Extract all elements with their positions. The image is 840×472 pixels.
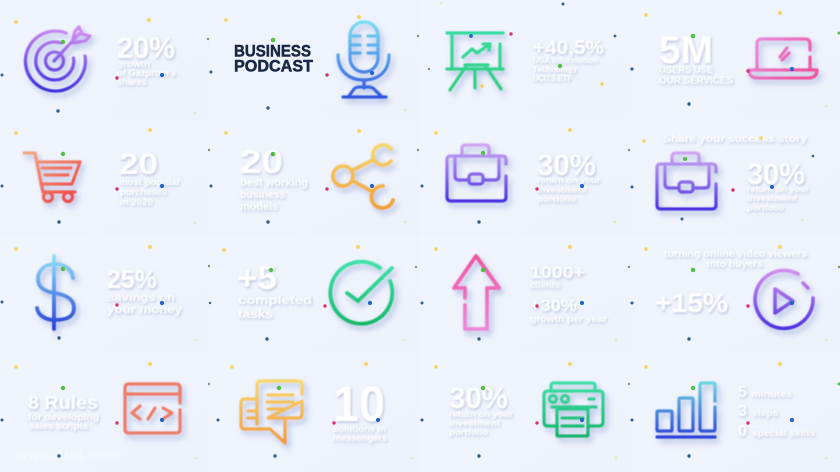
text: 20% growth: shares xyxy=(117,77,147,87)
panel: 20 best working business models xyxy=(240,143,393,213)
text: stats list xyxy=(738,384,815,440)
text: 20% growth xyxy=(117,32,176,87)
text: 30% xyxy=(449,382,514,437)
text: 20 most popular: in 2020 xyxy=(120,197,153,207)
icon: target with arrow xyxy=(25,27,90,91)
icon: presentation easel xyxy=(447,33,503,90)
text: stats list: 0 xyxy=(738,423,747,440)
text: 20 best working: best working xyxy=(240,177,308,189)
icon: code window xyxy=(125,384,180,433)
text: 20 best working xyxy=(240,143,308,213)
panel: 5 minutes 3 steps 0 special skills xyxy=(657,383,815,440)
text: 10: solutions in xyxy=(333,424,386,434)
panel: +5 completed tasks xyxy=(237,259,392,324)
icon: microphone xyxy=(338,22,389,97)
text: 5M users: USERS USE xyxy=(659,64,713,76)
heading: turning online video viewers: into buyers xyxy=(707,259,763,270)
text: +5: tasks xyxy=(238,307,273,321)
text: 30%: investment xyxy=(747,193,797,203)
text: 30%: return on your xyxy=(747,184,810,194)
text: 10: messengers xyxy=(333,433,387,443)
panel: 10 solutions in messengers xyxy=(241,376,387,443)
text: 1000+: 1000+ xyxy=(530,263,585,282)
text: +40,5%: USA Information xyxy=(533,56,598,65)
heading: business podcast: BUSINESS xyxy=(234,42,311,60)
text: 30% xyxy=(747,158,810,212)
text: +40,5%: +40,5% xyxy=(533,38,604,59)
text: 20% growth: of Gazprom's xyxy=(117,68,176,78)
text: stats list: steps xyxy=(752,408,778,418)
text: 8 rules: sales scripts xyxy=(29,421,88,431)
heading: turning online video viewers: turning online video viewers xyxy=(664,249,807,260)
text: 1000+: +30% xyxy=(530,296,577,315)
text: 25%: your money xyxy=(107,304,183,316)
text: stats list: 5 xyxy=(738,384,747,401)
text: 30% xyxy=(537,149,601,204)
heading: turning online video viewers xyxy=(664,249,807,270)
text: stats list: special skills xyxy=(752,428,815,438)
text: 20 best working: models xyxy=(240,201,278,213)
text: +5 xyxy=(237,259,312,321)
text: 8 rules: 8 Rules xyxy=(28,393,98,413)
text: 25%: 25% xyxy=(107,266,157,294)
icon: printer xyxy=(544,383,603,436)
panel: business podcast xyxy=(234,22,389,97)
text: 20 most popular xyxy=(119,148,181,207)
text: 20% growth: 20% xyxy=(117,32,175,65)
text: 30%: return on your xyxy=(537,175,601,185)
text: 1000+: growth per year xyxy=(530,314,608,324)
icon: laptop xyxy=(749,39,817,78)
text: 1000+ xyxy=(530,263,608,324)
text: stats list: minutes xyxy=(751,389,792,399)
text: 20 most popular: most popular xyxy=(119,177,181,187)
text: 20 best working: business xyxy=(240,189,285,201)
icon: play circle xyxy=(755,270,813,328)
text: 20 most popular: 20 xyxy=(119,148,158,181)
text: 30%: portfolio xyxy=(537,194,576,204)
text: 10: 10 xyxy=(333,376,385,432)
text: 30%: 30% xyxy=(449,382,508,415)
heading: business podcast: PODCAST xyxy=(234,58,313,76)
text: +5: +5 xyxy=(237,259,277,296)
text: +40,5%: UCITS ETF xyxy=(533,74,572,83)
text: 1000+: clients xyxy=(530,280,560,290)
text: 30%: portfolio xyxy=(449,427,488,437)
heading: business podcast xyxy=(234,42,313,76)
text: 5M users: 5M xyxy=(659,29,713,72)
heading: share your success story: Share your success story xyxy=(663,133,807,145)
icon: shopping cart xyxy=(24,153,80,202)
text: 25% xyxy=(107,266,183,316)
icon: up arrow xyxy=(454,256,499,329)
icon: share nodes xyxy=(333,145,393,208)
text: 25%: savings on xyxy=(107,292,175,304)
text: 30%: 30% xyxy=(747,158,805,191)
panel: +40,5% USA Information Technology UCITS ETF xyxy=(447,33,604,90)
panel: +15% online video viewers xyxy=(655,249,813,328)
text: 5M users: OUR SERVICES xyxy=(659,74,733,86)
text: 8 rules xyxy=(28,393,99,431)
text: 20 most popular: purchases xyxy=(120,187,167,197)
panel: 1000+ clients xyxy=(454,256,608,329)
text: 20% growth: growth xyxy=(117,59,150,69)
text: 30%: investment xyxy=(537,184,587,194)
text: 30%: 30% xyxy=(537,149,596,182)
icon: dollar sign xyxy=(37,256,74,329)
panel: 8 rules for developing sales scripts xyxy=(28,384,180,433)
icon: briefcase xyxy=(447,145,506,201)
text: 20 best working: 20 xyxy=(240,143,283,180)
icon: check circle xyxy=(330,262,392,324)
text: 30%: investment xyxy=(449,418,500,428)
text: 30%: return on your xyxy=(449,409,514,419)
panel: 30% return printer xyxy=(449,382,603,437)
watermark: www.1tsj.com xyxy=(14,447,120,462)
text: +40,5%: Technology xyxy=(533,65,578,74)
text: 30%: portfolio xyxy=(747,202,784,212)
icon: briefcase xyxy=(657,153,716,209)
text: +40,5% xyxy=(533,38,604,83)
text: 8 rules: for developing xyxy=(28,412,99,422)
text: 5M users xyxy=(659,29,733,86)
panel: share your success story xyxy=(657,133,810,212)
text: stats list: 3 xyxy=(738,403,747,420)
text: +5: completed xyxy=(238,293,312,307)
icon: bar chart xyxy=(657,383,715,437)
icon: chat bubbles xyxy=(241,381,302,443)
panel: 20 most popular purchases xyxy=(24,148,181,207)
panel: 20% growth of Gazprom's shares xyxy=(25,27,176,91)
panel: 5M users use our services xyxy=(659,29,817,86)
panel: 30% return on your investment portfolio xyxy=(447,145,601,204)
panel: 25% savings on your money xyxy=(37,256,183,329)
text: +15%: +15% xyxy=(655,288,728,318)
